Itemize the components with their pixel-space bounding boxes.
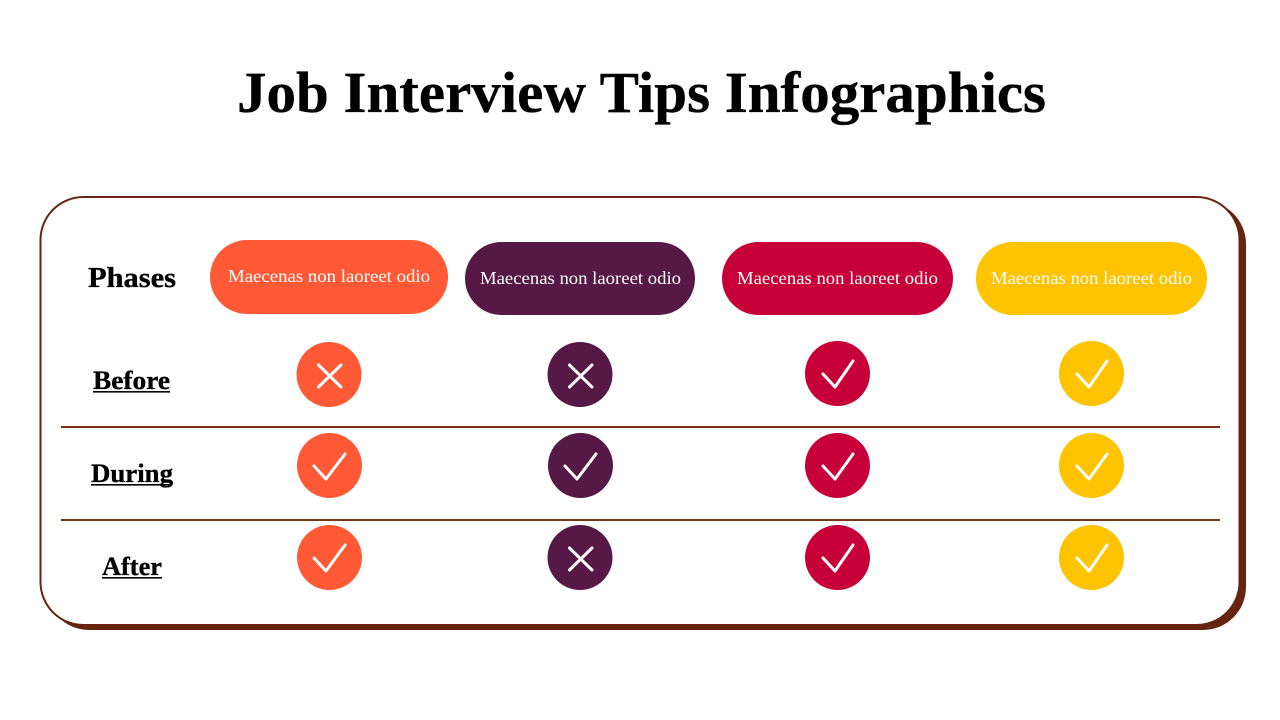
icon: after orange check [297, 525, 362, 590]
pill: orange [210, 240, 448, 314]
title: Job Interview Tips Infographics [237, 60, 1046, 125]
icon: during orange check [297, 433, 362, 498]
row label: Before: Before [93, 366, 170, 395]
pill: crimson [722, 242, 953, 315]
heading: Phases: Phases [88, 262, 176, 294]
icon: during crimson check [805, 433, 870, 498]
icon: after crimson check [805, 525, 870, 590]
pill: purple [465, 242, 695, 315]
pill: purple: Maecenas non laoreet odio [480, 268, 681, 288]
panel shadow [46, 201, 1246, 630]
panel: comparison table [40, 197, 1246, 630]
icon: after purple cross [548, 525, 612, 590]
icon: before yellow check [1059, 341, 1124, 406]
pill: yellow [976, 242, 1207, 315]
pill: yellow: Maecenas non laoreet odio [991, 268, 1192, 288]
icon: during yellow check [1059, 433, 1124, 498]
icon: during purple check [548, 433, 613, 498]
pill: crimson: Maecenas non laoreet odio [737, 268, 938, 288]
pill: orange: Maecenas non laoreet odio [228, 266, 430, 286]
icon: before purple cross [548, 342, 612, 407]
icon: before crimson check [805, 341, 870, 406]
icon: before orange cross [296, 342, 362, 407]
row label: After: After [102, 552, 162, 581]
icon: after yellow check [1059, 525, 1124, 590]
panel card [40, 197, 1240, 625]
row label: During: During [91, 459, 173, 488]
